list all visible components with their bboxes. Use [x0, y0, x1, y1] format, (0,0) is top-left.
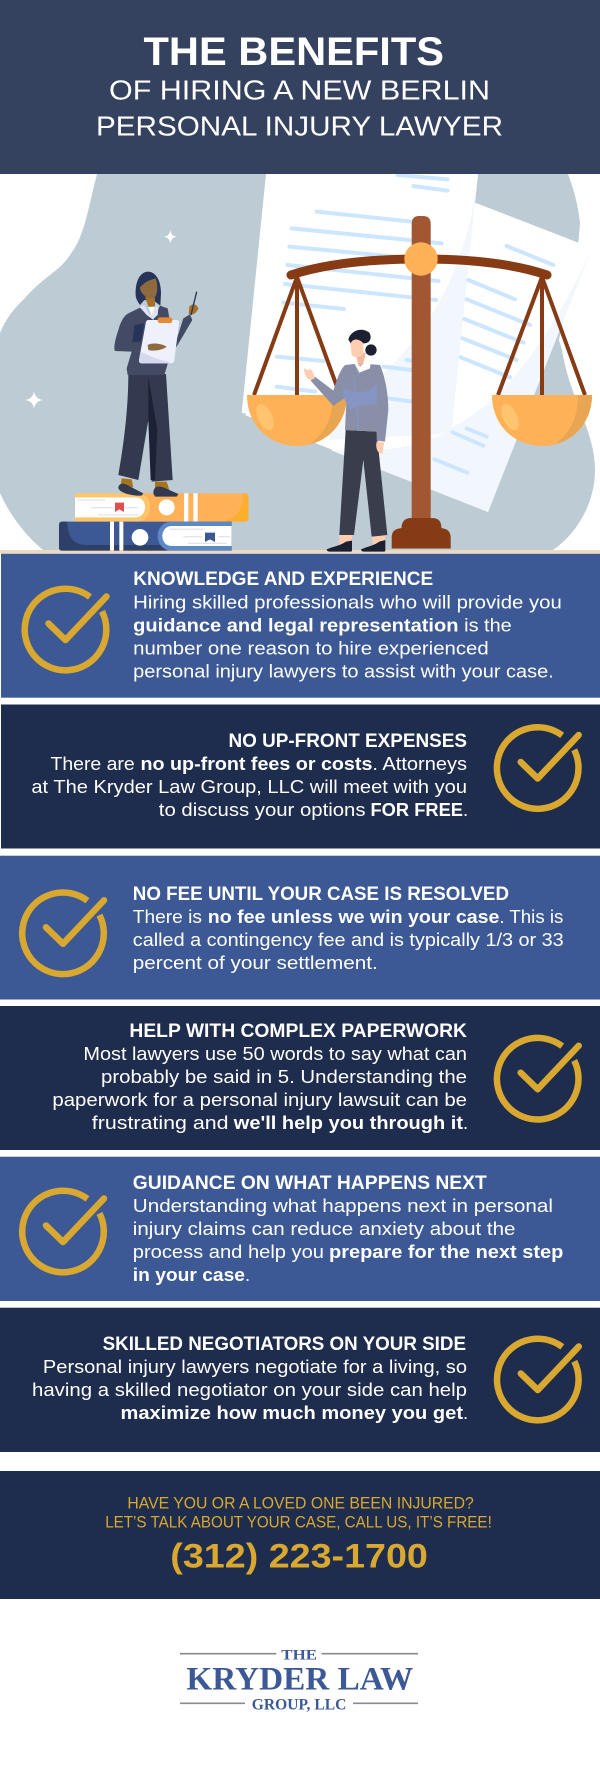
beam [291, 259, 547, 275]
panel text: GUIDANCE ON WHAT HAPPENS NEXT [133, 1172, 487, 1194]
title [96, 30, 503, 141]
documents [242, 174, 592, 512]
call to action text [105, 1494, 492, 1532]
panel text [133, 883, 564, 973]
icon: check circle [497, 1339, 579, 1420]
panel text: There are [50, 753, 135, 774]
panel text: no fee unless we win your case [208, 906, 499, 927]
panel text: maximize how much money you get [120, 1402, 463, 1423]
panel text: . [463, 799, 468, 820]
panel text: . [463, 1402, 468, 1423]
panel text: at The Kryder Law Group, LLC will meet with you [31, 776, 467, 797]
lawyer with clipboard [114, 272, 198, 497]
panel text: There is [133, 906, 202, 927]
pole [412, 216, 431, 530]
panel text: is the [464, 614, 512, 635]
panel text: percent of your settlement. [133, 952, 378, 973]
panel text [133, 568, 562, 681]
icon: check circle [22, 1191, 104, 1272]
panel text: SKILLED NEGOTIATORS ON YOUR SIDE [103, 1333, 466, 1355]
panel text: probably be said in 5. Understanding the [101, 1066, 467, 1087]
icon: check circle [25, 589, 107, 670]
scales of justice [247, 216, 592, 548]
panel text: personal injury lawyers to assist with your case. [133, 660, 554, 681]
panel text: frustrating and [92, 1112, 228, 1133]
panel text: Most lawyers use 50 words to say what can [83, 1043, 467, 1064]
title: THE BENEFITS [144, 30, 444, 74]
panel: skilled negotiators [0, 1308, 600, 1452]
header banner [0, 0, 600, 174]
sparkle large [25, 391, 43, 409]
logo: The Kryder Law Group: KRYDER LAW [186, 1661, 413, 1697]
panel: help with paperwork [0, 1006, 600, 1150]
title: PERSONAL INJURY LAWYER [96, 110, 503, 141]
right pan [492, 395, 592, 446]
icon: check circle [497, 1038, 579, 1120]
blue book [59, 522, 232, 551]
panel text: no up-front fees or costs [140, 753, 372, 774]
panel text: paperwork for a personal injury lawsuit can be [52, 1089, 467, 1110]
panel: no fee until resolved [0, 856, 600, 1000]
panel text: . [245, 1264, 250, 1285]
panel: guidance on what happens next [0, 1157, 600, 1301]
logo: The Kryder Law Group: GROUP, LLC [252, 1696, 346, 1713]
panel text: having a skilled negotiator on your side can help [32, 1379, 467, 1400]
logo: The Kryder Law Group: THE [281, 1647, 317, 1663]
panel text: called a contingency fee and is typically 1/3 or 33 [133, 929, 564, 950]
books [59, 493, 248, 551]
panel text [133, 1172, 563, 1285]
panel text: FOR FREE [370, 799, 463, 820]
left pan [247, 395, 347, 446]
panel text: HELP WITH COMPLEX PAPERWORK [129, 1020, 467, 1042]
panel text: number one reason to hire experienced [133, 637, 489, 658]
panel text: Personal injury lawyers negotiate for a living, so [43, 1356, 467, 1377]
panel text: to discuss your options [159, 799, 366, 820]
panel: knowledge and experience [1, 554, 600, 698]
illustration: lawyers and scales of justice [0, 174, 600, 553]
panel text: Understanding what happens next in personal [133, 1195, 553, 1216]
base [392, 518, 451, 548]
panel: no up-front expenses [1, 704, 600, 848]
icon: check circle [22, 893, 104, 974]
panel text: KNOWLEDGE AND EXPERIENCE [133, 568, 433, 590]
hub [404, 242, 438, 276]
right strings [498, 277, 585, 395]
panel text: NO UP-FRONT EXPENSES [228, 730, 467, 752]
panel text: we'll help you through it [233, 1112, 463, 1133]
lawyer in grey jacket [304, 330, 388, 552]
panel text: . This is [499, 906, 563, 927]
title: OF HIRING A NEW BERLIN [109, 74, 490, 105]
call to action text: HAVE YOU OR A LOVED ONE BEEN INJURED? [127, 1494, 474, 1513]
panel text [31, 730, 468, 820]
panel text: guidance and legal representation [133, 614, 458, 635]
orange book [75, 493, 248, 522]
panel text [32, 1333, 468, 1423]
logo: The Kryder Law Group [180, 1647, 418, 1713]
panel text: . Attorneys [372, 753, 467, 774]
left strings [254, 277, 340, 395]
sparkle small [164, 230, 177, 243]
panel text [52, 1020, 468, 1133]
panel text: NO FEE UNTIL YOUR CASE IS RESOLVED [133, 883, 509, 905]
panel text: . [463, 1112, 468, 1133]
icon: check circle [497, 727, 579, 809]
background blob [0, 174, 595, 550]
panel text: process and help you [133, 1241, 324, 1262]
panel text: injury claims can reduce anxiety about the [133, 1218, 516, 1239]
call to action text: LET’S TALK ABOUT YOUR CASE, CALL US, IT’S FREE! [105, 1513, 492, 1532]
ground line [0, 550, 600, 553]
call to action banner [0, 1471, 600, 1599]
panel text: Hiring skilled professionals who will provide you [133, 591, 562, 612]
phone number: (312) 223-1700 [170, 1537, 428, 1575]
panel text: in your case [133, 1264, 245, 1285]
panel text: prepare for the next step [329, 1241, 563, 1262]
